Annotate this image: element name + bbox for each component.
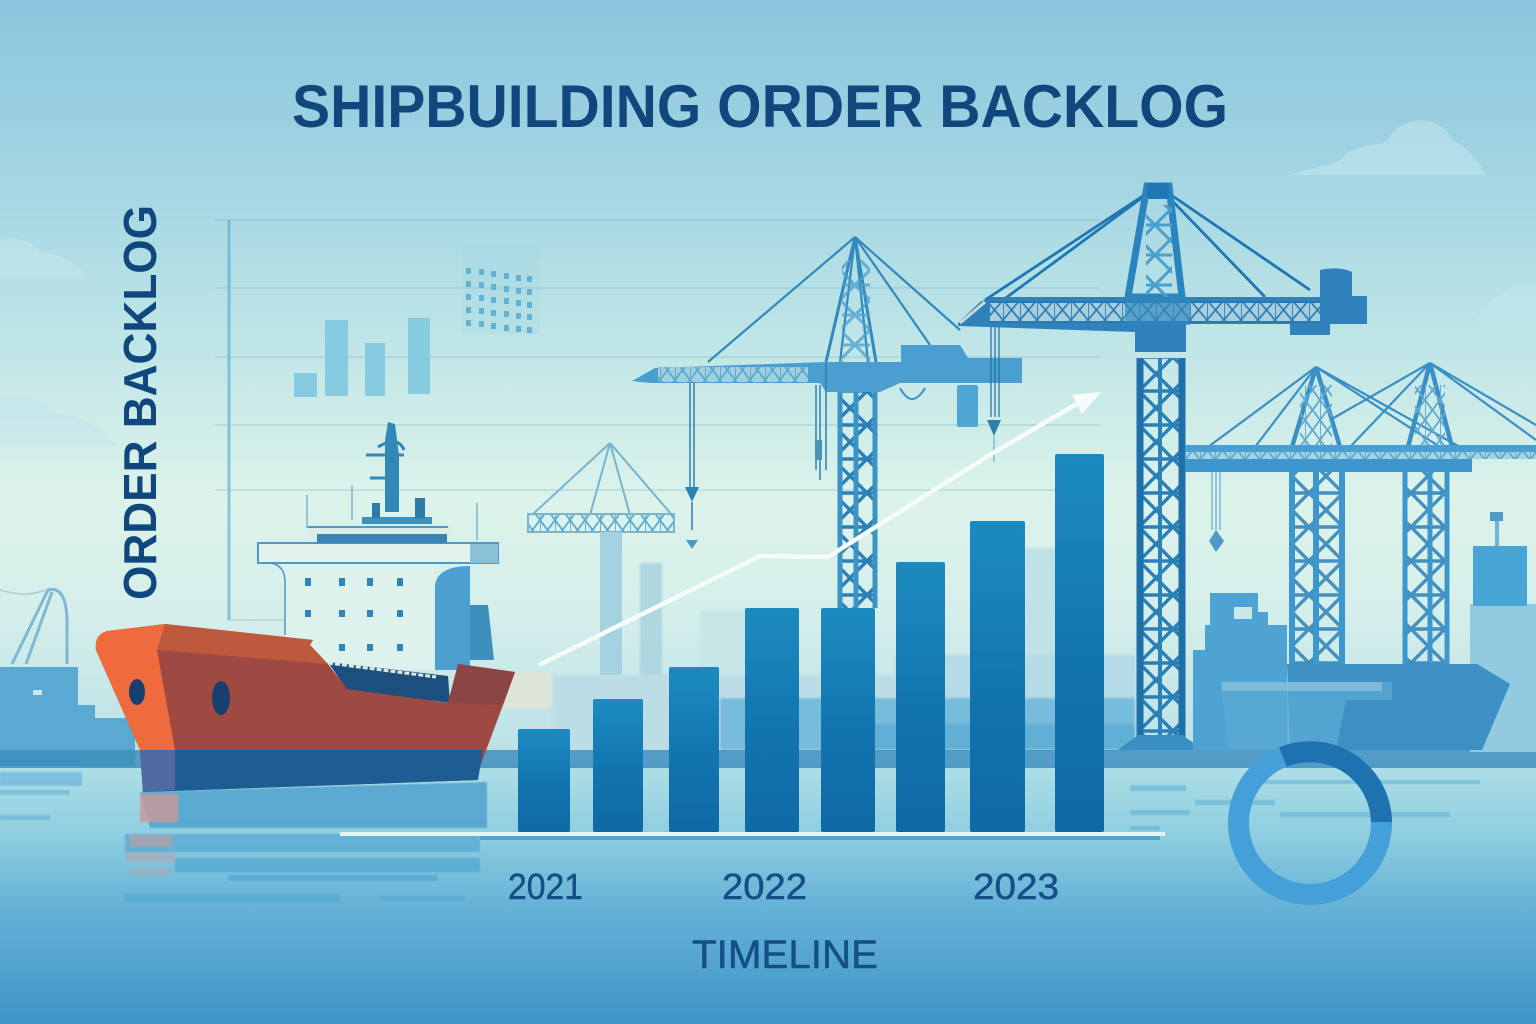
year label 2023: 2023 xyxy=(973,866,1059,907)
title: SHIPBUILDING ORDER BACKLOG xyxy=(292,73,1228,140)
quay band xyxy=(0,750,1536,768)
background sky xyxy=(0,0,1536,770)
water ripples xyxy=(0,772,1480,830)
ship reflection xyxy=(125,782,487,902)
hull stern shade xyxy=(448,664,515,705)
x axis label: TIMELINE xyxy=(692,933,878,977)
donut chart xyxy=(1238,752,1382,894)
bars xyxy=(518,454,1104,832)
hull waterline xyxy=(140,750,483,792)
ghost dot grid panel xyxy=(462,242,540,334)
hull upper band xyxy=(157,624,328,664)
ghost bar chart xyxy=(294,318,430,397)
crane A xyxy=(632,237,1022,608)
year label 2022: 2022 xyxy=(722,866,807,907)
y axis label: ORDER BACKLOG xyxy=(114,205,166,600)
chart baseline xyxy=(340,832,1165,840)
hull bow facet xyxy=(96,624,175,750)
ship superstructure xyxy=(258,422,498,670)
ship deck xyxy=(328,662,450,703)
right harbour buildings and ship xyxy=(1193,512,1536,752)
left shore buildings xyxy=(0,589,135,766)
trend arrow xyxy=(541,392,1101,664)
year label 2021: 2021 xyxy=(508,866,583,907)
ship xyxy=(96,422,515,792)
distant crane left xyxy=(528,443,674,675)
porthole front xyxy=(129,679,145,705)
porthole side xyxy=(212,681,230,715)
cranes C and D xyxy=(1185,363,1536,664)
ghost chart axes and grid xyxy=(215,220,1100,620)
background water xyxy=(0,766,1536,1024)
clouds xyxy=(0,120,1536,445)
distant port skyline xyxy=(500,548,1135,750)
ship hull xyxy=(96,624,515,792)
crane B xyxy=(958,183,1367,750)
